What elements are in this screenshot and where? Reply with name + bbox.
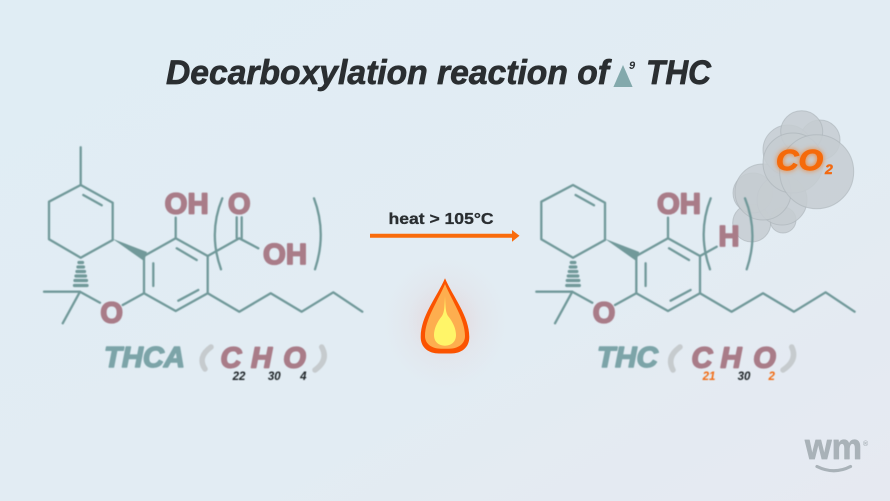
THCA formula: H [251,342,273,374]
logo: wm: wm [804,426,862,467]
THC formula: 2 [767,371,775,383]
THC molecule: H [719,221,739,253]
logo: wm: ® [863,440,869,448]
THC formula: C [692,342,714,374]
THCA formula [104,342,324,383]
title: 9 [629,60,636,72]
THCA formula: 30 [268,371,281,383]
CO2 label: 2 [824,161,833,177]
THC formula: 30 [738,371,751,383]
reaction arrow: heat > 105°C [388,211,494,228]
THCA formula: 4 [299,371,307,383]
title: Decarboxylation reaction of [166,54,613,92]
THCA molecule: O [228,188,251,220]
THC formula: THC [597,342,659,374]
THCA formula: THCA [104,342,185,374]
icon: flame [383,256,507,388]
THCA formula: O [283,342,306,374]
THC formula [597,342,794,383]
reaction arrow [370,211,520,242]
THCA molecule: OH [263,239,307,271]
title: THC [646,54,711,92]
THCA molecule [44,147,362,330]
THC formula: H [721,342,743,374]
CO2 cloud [733,111,854,242]
CO2 label: CO [776,145,823,177]
THCA formula: 22 [232,371,246,383]
THCA formula: C [221,342,243,374]
THC formula: 21 [702,371,715,383]
THC molecule [536,185,855,330]
icon: delta triangle [613,65,633,87]
CO2 label: CO [776,145,823,177]
THC formula: O [753,342,776,374]
